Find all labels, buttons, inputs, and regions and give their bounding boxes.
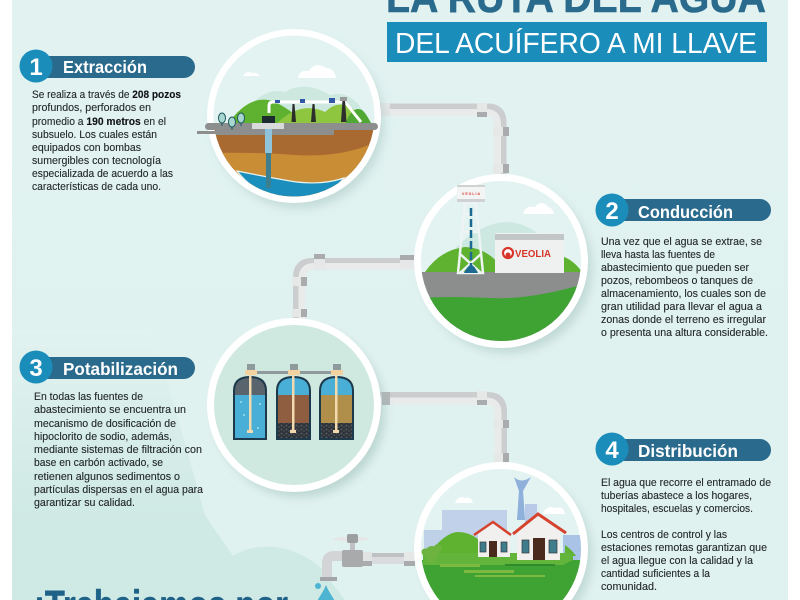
step 1 scene circle: [197, 29, 384, 208]
step 3 text: abastecimiento se encuentra un: [34, 404, 186, 416]
step 2 scene circle: VEOLIA: [515, 249, 551, 260]
step 4 label: 4: [605, 437, 619, 464]
step 2 scene circle: VEOLIA: [462, 192, 480, 196]
step 2 text: o presenta una altura considerable.: [601, 327, 768, 339]
step 3 text: En todas las fuentes de: [34, 391, 143, 403]
subtitle banner: DEL ACUÍFERO A MI LLAVE: [395, 27, 757, 60]
bush: [422, 544, 442, 563]
pipe: extraction to conduction: [378, 103, 509, 176]
step 4 scene circle: [414, 462, 592, 600]
step 4 text: [601, 477, 771, 593]
step 3 text: garantizar su calidad.: [34, 497, 135, 509]
step 4 text: tuberías abastece a los hogares,: [601, 490, 752, 502]
step 4 text: hospitales, escuelas y comercios.: [601, 503, 753, 515]
step 3 scene circle: [207, 318, 385, 497]
step 3 label: Potabilización: [63, 359, 178, 379]
step 2 text: [601, 236, 768, 339]
step 4 text: cantidad suficientes a la: [601, 568, 711, 580]
step 4 text: el agua llegue con la calidad y la: [601, 555, 754, 567]
icon: faucet and water drop: [315, 534, 418, 600]
step 1 text: Se realiza a través de 208 pozos: [32, 89, 181, 101]
filter tank 2: [277, 364, 310, 440]
step 1 label: [20, 50, 195, 82]
filter tank 1: [234, 364, 266, 440]
step 4 label: [596, 432, 771, 466]
step 1 text: sumergibles con tecnología: [32, 155, 162, 167]
step 1 text: equipados con bombas: [32, 142, 141, 154]
step 2 text: lleva hasta las fuentes de: [601, 249, 715, 261]
step 3 text: retienen algunos sedimentos o: [34, 471, 180, 483]
step 3 text: hipoclorito de sodio, además,: [34, 431, 172, 443]
step 2 text: zonas donde el terreno es irregular: [601, 314, 766, 326]
step 4 text: comunidad.: [601, 581, 657, 593]
step 2 label: [596, 194, 771, 226]
step 2 scene circle: [414, 174, 592, 353]
pipe: potabilization to distribution: [378, 391, 509, 466]
house small: [474, 522, 511, 557]
step 3 text: [34, 391, 204, 509]
step 1 label: Extracción: [63, 57, 147, 77]
step 2 text: Una vez que el agua se extrae, se: [601, 236, 762, 248]
step 1 text: profundos, perforados en: [32, 102, 151, 114]
step 4 text: Los centros de control y las: [601, 529, 727, 541]
step 1 text: especializada de acuerdo a las: [32, 168, 173, 180]
step 2 text: almacenamiento, los cuales son de: [601, 288, 766, 300]
step 4 text: El agua que recorre el entramado de: [601, 477, 771, 489]
step 3 text: base en carbón activado, se: [34, 457, 163, 469]
step 1 text: promedio a 190 metros en el: [32, 116, 166, 128]
step 3 label: 3: [29, 355, 43, 382]
step 4 text: estaciones remotas garantizan que: [601, 542, 767, 554]
step 2 text: gran utilidad para llevar el agua a: [601, 301, 763, 313]
step 3 label: [20, 350, 195, 384]
step 1 text: características de cada uno.: [32, 181, 161, 193]
step 1 text: [32, 89, 181, 193]
filter tank 3: [320, 364, 353, 440]
pipe: conduction to potabilization: [292, 254, 420, 322]
step 3 text: mecanismo de dosificación de: [34, 418, 176, 430]
step 2 label: 2: [605, 198, 619, 225]
step 1 text: subsuelo. Los cuales están: [32, 129, 157, 141]
step 1 label: 1: [29, 54, 43, 81]
step 3 text: mediante sistemas de filtración con: [34, 444, 202, 456]
step 2 text: abastecimiento que pueden ser: [601, 262, 749, 274]
step 2 label: Conducción: [638, 202, 733, 222]
step 2 text: pozos, rebombeos o tanques de: [601, 275, 753, 287]
house large: [513, 514, 566, 560]
step 4 label: Distribución: [638, 441, 738, 461]
step 3 text: partículas dispersas en el agua para: [34, 484, 204, 496]
